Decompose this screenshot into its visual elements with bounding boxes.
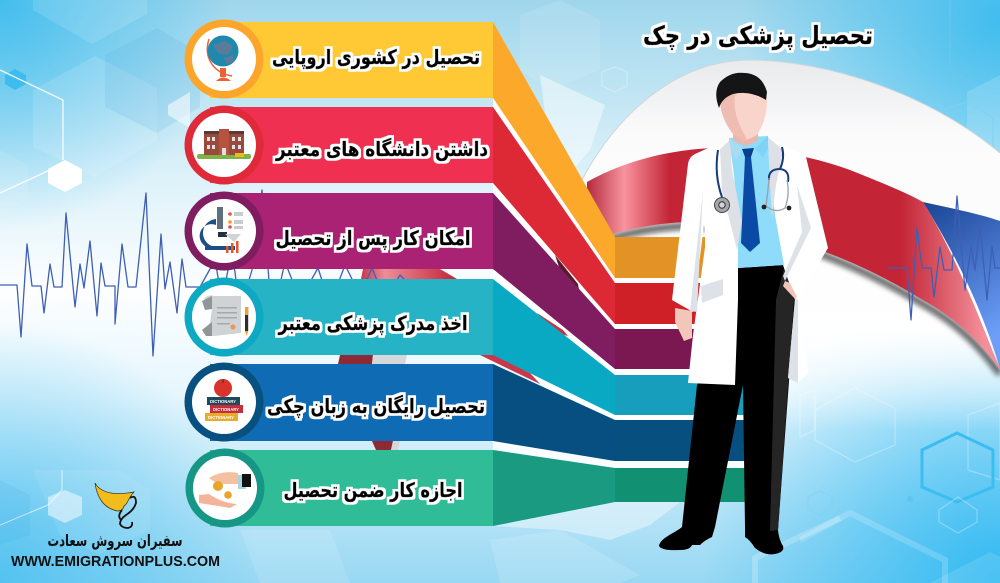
item 3: work after study [184, 192, 470, 270]
stethoscope [714, 147, 791, 212]
logo name: سفیران سروش سعادت [48, 531, 182, 550]
coat lapels [720, 137, 783, 250]
label: اجازه کار ضمن تحصیل [284, 478, 462, 502]
icon: globe [207, 36, 238, 81]
icon: university building [197, 129, 251, 159]
white dome with ribbon of the Czech flag [577, 60, 1000, 430]
band 1: orange [210, 22, 705, 278]
doctor figure [659, 73, 828, 554]
ribbon fragments seen through gaps [338, 269, 457, 450]
icon: diploma and pen [202, 295, 248, 336]
neck and face [720, 92, 767, 146]
item 6: work permit during study [186, 448, 462, 528]
item 4: reputable medical degree [184, 278, 468, 356]
collar and tie [729, 136, 768, 252]
hand in pocket [783, 281, 797, 299]
panel: stacked ribbons [210, 22, 745, 526]
trousers [659, 264, 795, 554]
icon: apple on dictionaries: DICTIONARY [210, 399, 236, 404]
label: داشتن دانشگاه های معتبر [275, 137, 488, 161]
white coat [672, 138, 828, 385]
heartbeat line left [0, 190, 430, 356]
item 5: free study in Czech [184, 362, 485, 442]
icon: microscope and charts [200, 207, 243, 253]
title: تحصیل پزشکی در چک [643, 21, 873, 51]
band 4: teal [210, 279, 745, 415]
band 2: red [210, 107, 700, 324]
icon: winged bird [95, 483, 136, 528]
label: تحصیل در کشوری اروپایی [272, 45, 480, 70]
item 2: reputable universities [184, 106, 488, 184]
shirt [729, 136, 784, 268]
band 6: green [210, 450, 745, 526]
website: WWW.EMIGRATIONPLUS.COM [11, 553, 220, 570]
label: اخذ مدرک پزشکی معتبر [278, 311, 468, 336]
ribbon seen through diagonal gaps [480, 255, 580, 384]
label: تحصیل رایگان به زبان چکی [267, 394, 485, 419]
hair [716, 73, 767, 108]
icon: apple on dictionaries [205, 379, 243, 421]
band 3: purple [210, 193, 700, 369]
icon: hands and coins [199, 472, 251, 508]
band 5: blue [210, 364, 745, 461]
heartbeat line right [888, 196, 1000, 320]
label: امکان کار پس از تحصیل [276, 226, 470, 251]
logo [11, 483, 220, 570]
white separator strips [493, 97, 745, 468]
icon: apple on dictionaries: DICTIONARY [208, 415, 234, 420]
arm and hand left [675, 308, 692, 341]
item 1: study in a European country [184, 20, 480, 98]
icon: apple on dictionaries: DICTIONARY [213, 407, 239, 412]
